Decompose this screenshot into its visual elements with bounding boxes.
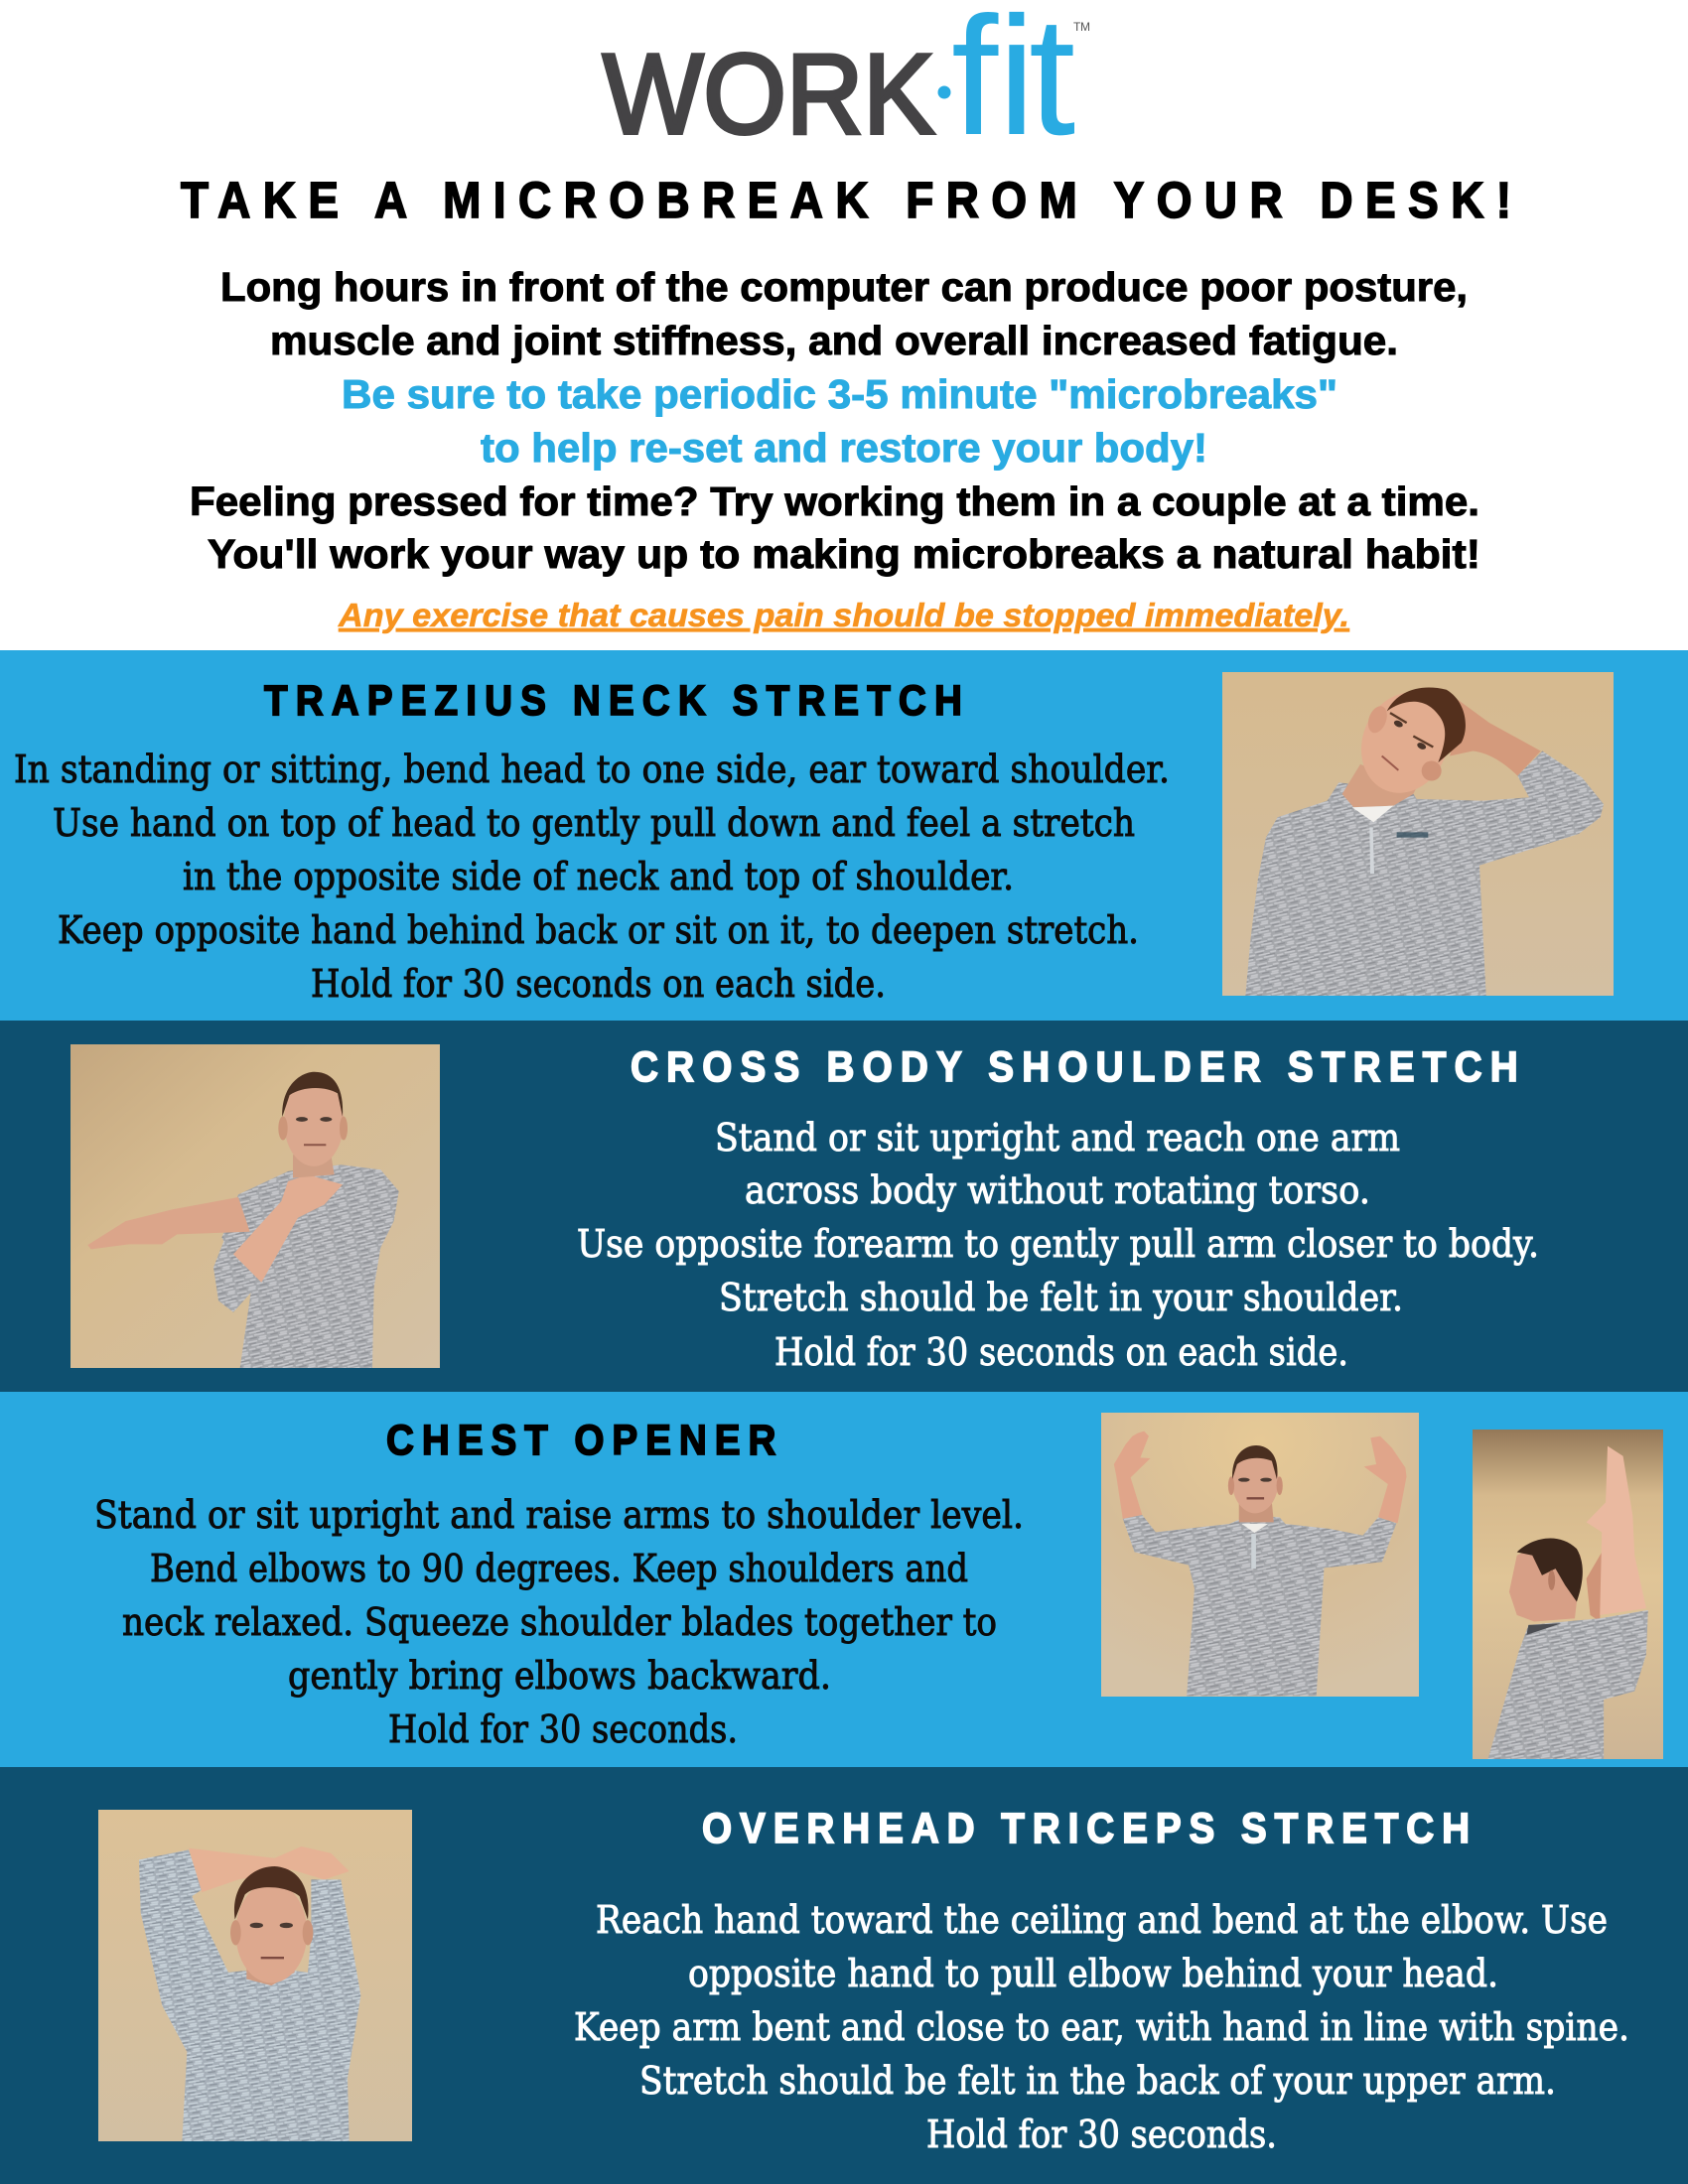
- instructions: Hold for 30 seconds on each side.: [774, 1330, 1348, 1374]
- panel: cross body shoulder stretch: [0, 1021, 1688, 1392]
- instructions: Stand or sit upright and reach one arm: [715, 1116, 1400, 1160]
- panel: overhead triceps stretch: [0, 1767, 1688, 2184]
- panel: chest opener: [0, 1392, 1688, 1767]
- intro text block: muscle and joint stiffness, and overall increased fatigue.: [270, 318, 1398, 363]
- logo: WORK fit: [603, 0, 1090, 171]
- photo: cross body stretch: [70, 1044, 440, 1368]
- instructions: Use opposite forearm to gently pull arm closer to body.: [577, 1222, 1539, 1266]
- instructions: across body without rotating torso.: [745, 1168, 1370, 1212]
- warning callout: Any exercise that causes pain should be stopped immediately.: [338, 597, 1349, 633]
- intro text block: Feeling pressed for time? Try working them in a couple at a time.: [190, 478, 1479, 524]
- intro text block: Long hours in front of the computer can produce poor posture,: [220, 264, 1468, 310]
- instructions: Hold for 30 seconds.: [926, 2113, 1277, 2156]
- instructions: Use hand on top of head to gently pull down and feel a stretch: [53, 801, 1135, 845]
- instructions: Bend elbows to 90 degrees. Keep shoulders and: [150, 1547, 968, 1590]
- intro text block: to help re-set and restore your body!: [481, 425, 1207, 471]
- instructions: Keep opposite hand behind back or sit on it, to deepen stretch.: [58, 908, 1139, 952]
- instructions: in the opposite side of neck and top of shoulder.: [183, 855, 1014, 898]
- instructions: In standing or sitting, bend head to one side, ear toward shoulder.: [14, 748, 1170, 791]
- title: TAKE A MICROBREAK FROM YOUR DESK!: [181, 173, 1511, 229]
- intro text block: [190, 264, 1480, 577]
- instructions: Stand or sit upright and raise arms to shoulder level.: [94, 1493, 1024, 1537]
- intro text block: You'll work your way up to making microbreaks a natural habit!: [208, 531, 1480, 577]
- photo: overhead triceps stretch: [98, 1810, 412, 2141]
- instructions: Stretch should be felt in your shoulder.: [719, 1276, 1403, 1319]
- intro text block: Be sure to take periodic 3-5 minute "microbreaks": [342, 371, 1337, 417]
- heading: CHEST OPENER: [386, 1416, 775, 1463]
- logo: WORK fit: TM: [1073, 20, 1090, 34]
- photo: chest opener side view: [1473, 1430, 1663, 1759]
- photo: neck stretch: [1222, 672, 1614, 996]
- instructions: Hold for 30 seconds.: [388, 1707, 738, 1751]
- instructions: neck relaxed. Squeeze shoulder blades together to: [122, 1600, 997, 1644]
- instructions: Hold for 30 seconds on each side.: [311, 962, 886, 1006]
- instructions: [577, 1116, 1539, 1374]
- logo: WORK fit: WORK: [603, 32, 934, 158]
- heading: OVERHEAD TRICEPS STRETCH: [702, 1804, 1470, 1851]
- instructions: [94, 1493, 1024, 1751]
- instructions: gently bring elbows backward.: [288, 1654, 831, 1698]
- heading: CROSS BODY SHOULDER STRETCH: [631, 1042, 1518, 1090]
- photo: chest opener front view: [1101, 1413, 1419, 1697]
- instructions: [14, 748, 1170, 1006]
- heading: TRAPEZIUS NECK STRETCH: [264, 676, 962, 724]
- instructions: [574, 1898, 1629, 2156]
- instructions: Reach hand toward the ceiling and bend at the elbow. Use: [596, 1898, 1608, 1942]
- instructions: opposite hand to pull elbow behind your head.: [688, 1952, 1498, 1995]
- panel: trapezius neck stretch: [0, 650, 1688, 1021]
- instructions: Stretch should be felt in the back of your upper arm.: [639, 2059, 1556, 2103]
